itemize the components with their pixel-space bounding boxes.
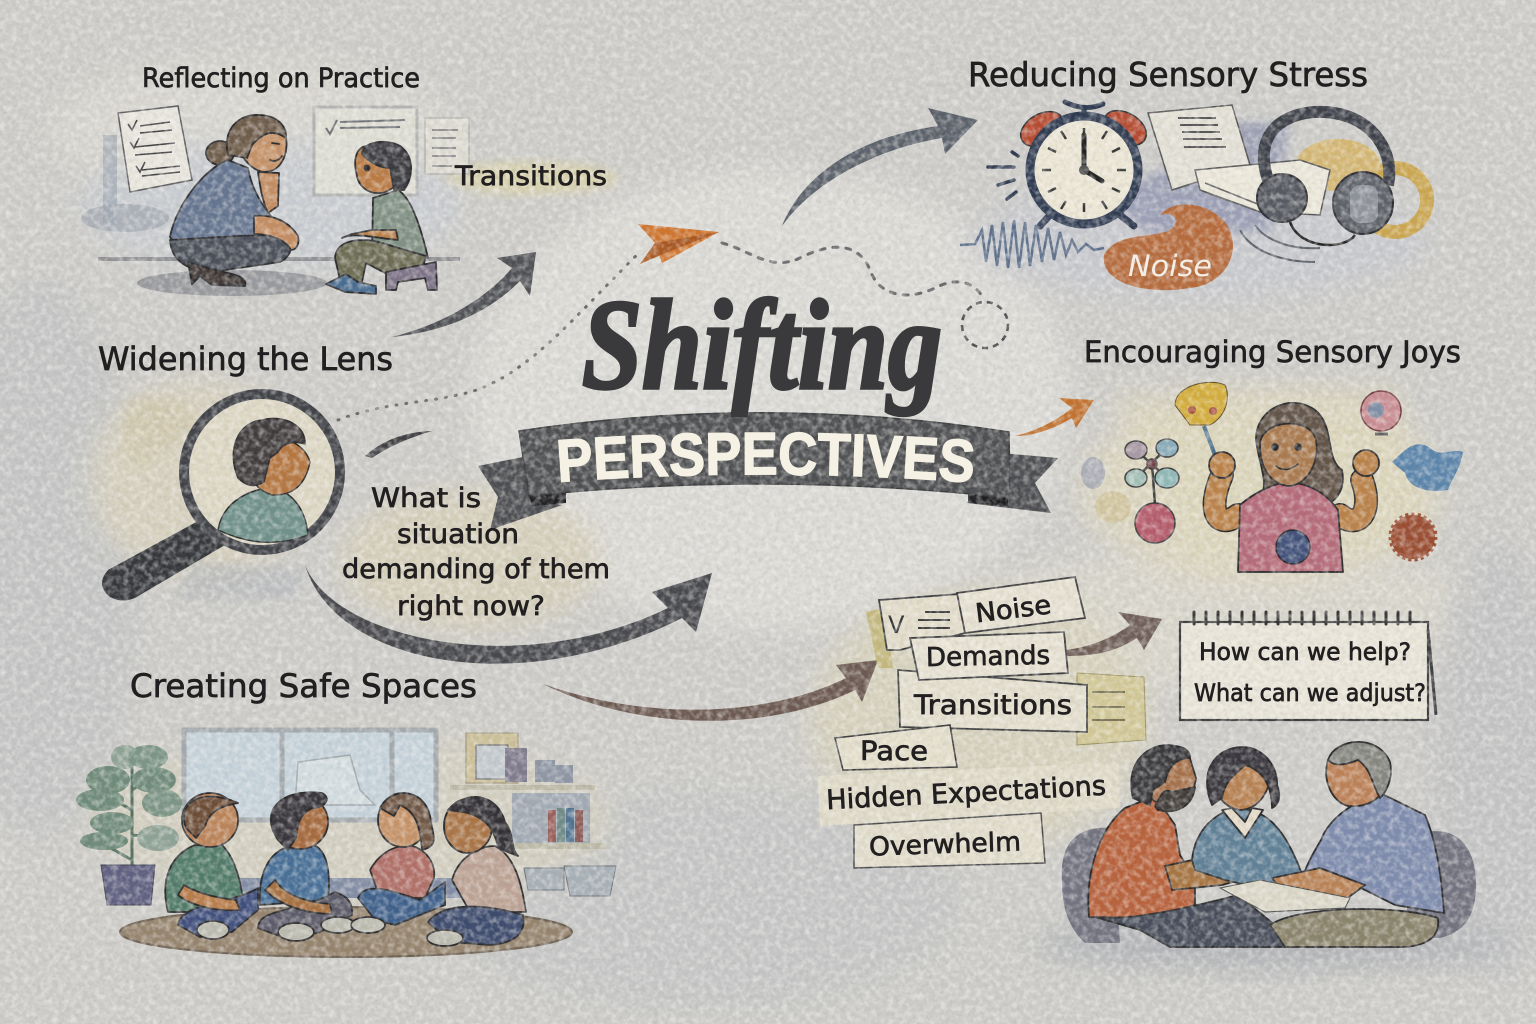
arrow: lens to centre xyxy=(305,565,712,664)
older man xyxy=(1270,742,1444,947)
notepad question two: What can we adjust? xyxy=(1194,679,1426,707)
question text: situation xyxy=(397,519,519,550)
notes cluster xyxy=(818,577,1146,868)
label: Transitions: Transitions xyxy=(454,161,607,192)
child four xyxy=(427,797,526,946)
yellow toy xyxy=(1175,382,1227,458)
note: check: V xyxy=(888,611,905,639)
note text: Demands: Demands xyxy=(926,641,1050,673)
noise blob xyxy=(1104,205,1233,290)
label: Noise: Noise xyxy=(1128,249,1212,283)
question text: What is xyxy=(371,483,481,514)
woman xyxy=(170,115,299,286)
heading: Widening the Lens: Widening the Lens xyxy=(98,340,393,378)
floor shadow xyxy=(137,270,327,296)
icon: paper plane xyxy=(638,224,719,264)
note: Hidden Expectations box xyxy=(818,762,1120,826)
notepad question one: How can we help? xyxy=(1199,638,1411,666)
note text: Hidden Expectations: Hidden Expectations xyxy=(825,771,1107,816)
illustration: magnifying glass xyxy=(102,394,340,601)
title script: Shifting: Shifting xyxy=(582,274,942,416)
heading: Reducing Sensory Stress: Reducing Sensory Stress xyxy=(968,55,1368,94)
note text: Noise: Noise xyxy=(974,590,1053,629)
arrow: safe spaces to checklist xyxy=(543,660,878,721)
child in lens xyxy=(218,418,310,542)
flower toy xyxy=(1125,439,1179,505)
note: check xyxy=(879,594,965,650)
heading: Reflecting on Practice: Reflecting on Practice xyxy=(142,63,420,94)
illustration: sensory joys xyxy=(1081,382,1463,572)
red burst xyxy=(1391,515,1435,559)
note: Demands box xyxy=(910,632,1068,680)
blue coral xyxy=(1392,444,1463,491)
note: Pace box xyxy=(835,725,957,770)
shared notebook xyxy=(1220,880,1350,912)
heading: Creating Safe Spaces: Creating Safe Spaces xyxy=(130,667,477,705)
child three xyxy=(351,793,445,933)
sound wave xyxy=(960,220,1104,268)
pink bauble xyxy=(1135,503,1175,543)
girl xyxy=(1209,403,1379,572)
illustration: three adults in conversation xyxy=(1030,742,1510,970)
note: Transitions box xyxy=(898,670,1087,732)
arrow: title to joys xyxy=(1015,398,1094,436)
spiral rings xyxy=(1194,612,1410,624)
dotted flight path xyxy=(338,243,982,420)
question text: right now? xyxy=(397,591,545,622)
question text: demanding of them xyxy=(342,554,610,585)
illustration: reflecting on practice xyxy=(80,106,469,296)
notepad panel xyxy=(1180,612,1436,720)
books and papers xyxy=(1148,105,1330,215)
window xyxy=(184,730,436,820)
boy xyxy=(326,142,437,294)
pink balloon xyxy=(1361,391,1401,434)
note: Noise box xyxy=(957,577,1085,633)
banner word: PERSPECTIVES xyxy=(558,432,974,482)
man with beard xyxy=(1088,745,1285,947)
side note xyxy=(425,118,469,174)
arrow: checklist to notepad xyxy=(1066,612,1162,656)
arrow: practice to title xyxy=(392,252,536,337)
wall shelves xyxy=(450,733,616,896)
wall chart xyxy=(314,107,417,195)
note text: Transitions: Transitions xyxy=(913,690,1072,721)
child one xyxy=(165,793,258,939)
alarm clock xyxy=(988,102,1152,226)
rug xyxy=(120,907,572,957)
note: yellow sheet xyxy=(1077,673,1146,745)
heading: Encouraging Sensory Joys: Encouraging Sensory Joys xyxy=(1084,335,1461,369)
potted plant xyxy=(76,745,182,905)
icon: dashed circle xyxy=(962,302,1008,348)
note text: Pace: Pace xyxy=(860,736,928,767)
headphones xyxy=(1257,112,1393,245)
question text xyxy=(342,483,610,622)
arrow: up to reducing stress xyxy=(782,108,978,226)
checklist on wall xyxy=(118,106,192,192)
note: Overwhelm box xyxy=(854,813,1045,868)
stroke: lens accent xyxy=(365,431,432,458)
illustration: safe space classroom xyxy=(76,730,616,957)
sofa xyxy=(1062,828,1476,943)
note text: Overwhelm: Overwhelm xyxy=(869,827,1021,863)
child two xyxy=(258,792,355,941)
banner xyxy=(478,413,1058,530)
woman xyxy=(1192,747,1304,895)
yellow rings xyxy=(1296,139,1427,232)
illustration: sensory stress xyxy=(960,102,1427,290)
